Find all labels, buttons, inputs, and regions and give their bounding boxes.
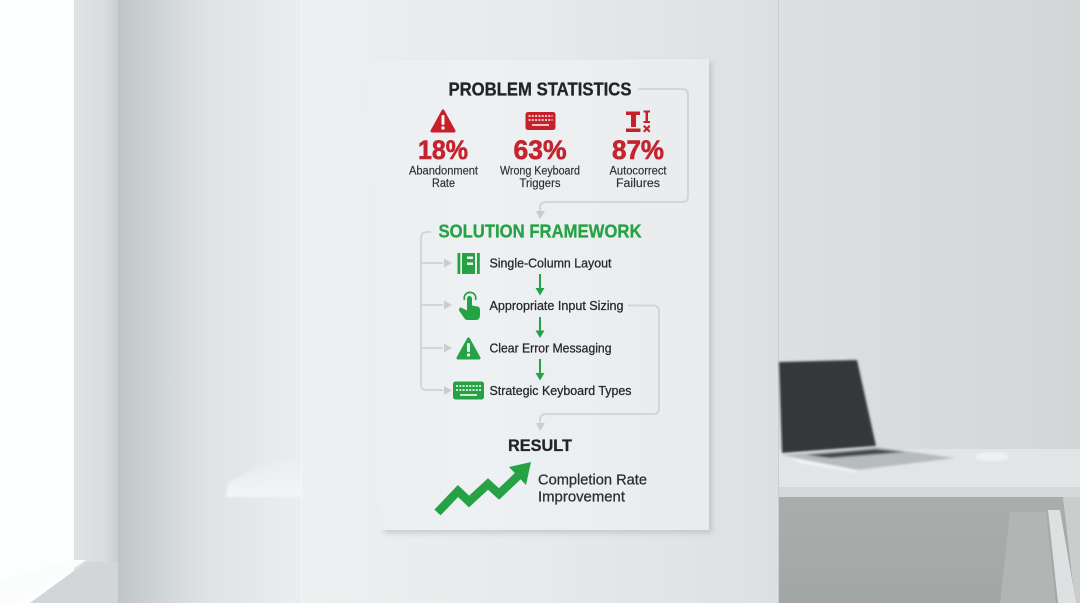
poster xyxy=(367,59,712,533)
arrow: step 1 to 2 xyxy=(536,274,544,296)
stat: 18%: 18% xyxy=(418,135,468,165)
mouse xyxy=(975,452,1009,461)
icon: warning green xyxy=(458,339,479,358)
connector: framework to result xyxy=(540,306,659,424)
arrowhead: to result xyxy=(536,423,545,431)
icon: keyboard green xyxy=(453,382,484,400)
icon: keyboard xyxy=(526,112,556,130)
heading: result: RESULT xyxy=(508,436,573,455)
connector: statistics to framework xyxy=(540,89,688,213)
step: clear error messaging: Clear Error Messaging xyxy=(490,342,612,356)
laptop xyxy=(779,360,955,473)
connector: left branch xyxy=(421,232,443,390)
step: appropriate input sizing: Appropriate Input Sizing xyxy=(490,299,624,313)
desk with laptop and mouse xyxy=(779,360,1080,603)
label: abandonment rate: Rate xyxy=(432,178,455,190)
icon: text autocorrect xyxy=(626,110,650,132)
arrowheads: left branch xyxy=(444,258,452,395)
label: wrong keyboard triggers: Wrong Keyboard xyxy=(500,166,580,178)
label: autocorrect failures: Failures xyxy=(616,178,660,190)
heading: solution framework: SOLUTION FRAMEWORK xyxy=(438,222,642,242)
heading: problem statistics: PROBLEM STATISTICS xyxy=(448,78,632,100)
icon: tap finger xyxy=(459,292,480,320)
label: wrong keyboard triggers: Triggers xyxy=(520,178,561,190)
step: single-column layout: Single-Column Layout xyxy=(490,256,612,270)
arrow: step 2 to 3 xyxy=(536,317,544,338)
step: strategic keyboard types: Strategic Keyboard Types xyxy=(490,384,632,398)
icon: single column layout xyxy=(458,253,480,274)
stat: 63%: 63% xyxy=(514,135,566,165)
arrowhead: to framework xyxy=(536,211,545,219)
icon: growth arrow xyxy=(438,462,531,512)
icon: warning xyxy=(432,111,454,131)
text: completion rate improvement: Improvement xyxy=(538,490,625,506)
label: autocorrect failures: Autocorrect xyxy=(610,166,667,178)
stat: 87%: 87% xyxy=(612,135,664,165)
arrow: step 3 to 4 xyxy=(536,359,544,380)
label: abandonment rate: Abandonment xyxy=(409,166,479,178)
text: completion rate improvement: Completion Rate xyxy=(538,472,647,488)
